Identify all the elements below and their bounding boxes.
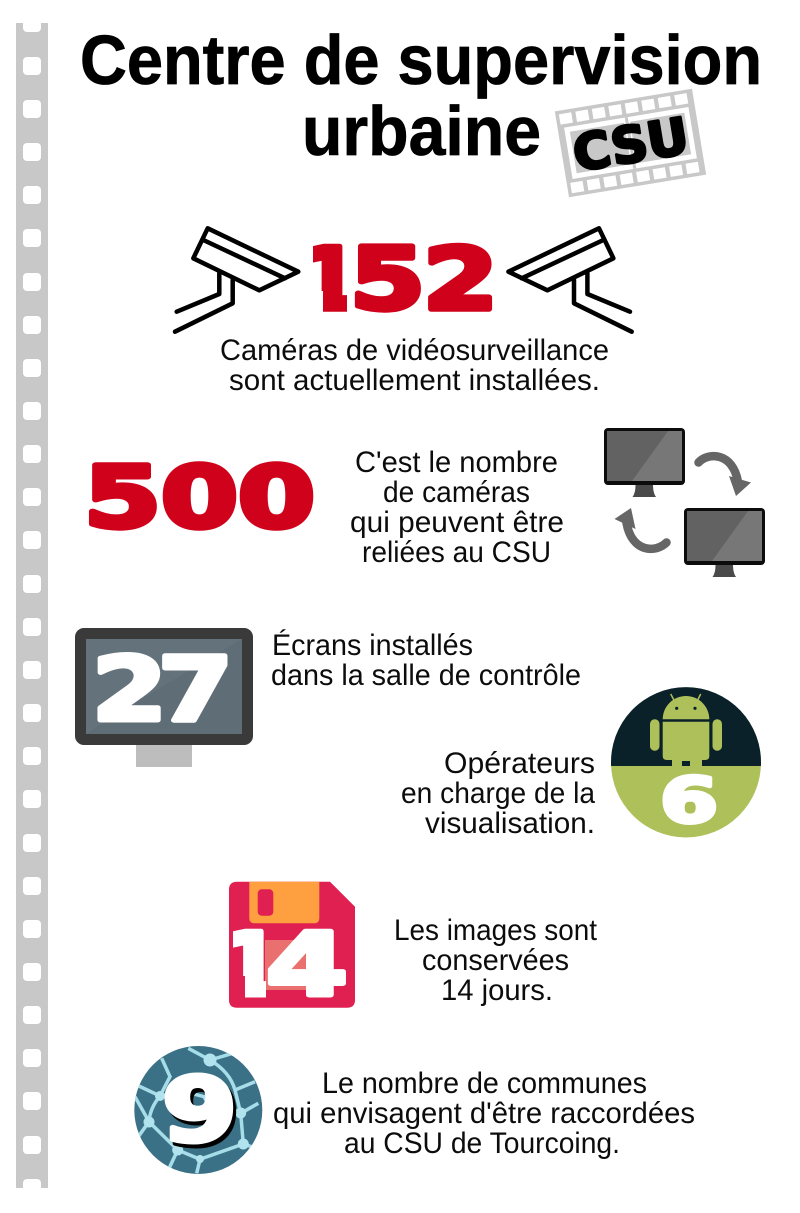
text: 500 caption: C'est le nombre: [355, 446, 558, 479]
number: 152: 1: [300, 230, 360, 330]
text: 500 caption: [350, 446, 564, 569]
stat: 152 cameras: [175, 228, 632, 397]
stat: 27 screens: [75, 628, 581, 767]
number: 27: [92, 638, 233, 741]
text: operators caption: en charge de la: [401, 777, 596, 810]
text: screens caption: dans la salle de contrôle: [271, 659, 581, 692]
stat: 9 municipalities: [134, 1046, 695, 1174]
icon: left surveillance camera: [175, 228, 298, 332]
icon: monitor with 27: [75, 628, 253, 767]
number: 152: 5: [350, 230, 425, 330]
text: cameras caption: sont actuellement installées.: [229, 364, 600, 397]
text: screens caption: [271, 629, 581, 692]
text: municipalities caption: qui envisagent d'être raccordées: [273, 1097, 695, 1130]
number: 27: 2: [92, 638, 167, 741]
number: 9: 9: [162, 1059, 237, 1162]
text: retention caption: conservées: [422, 944, 569, 977]
label: CSU: CSU: [569, 107, 693, 183]
icon: android badge with 6: [611, 687, 761, 838]
icon: monitor bottom: [684, 508, 765, 577]
number: 500: 500: [84, 449, 315, 548]
text: cameras caption: Caméras de vidéosurveillance: [220, 334, 609, 367]
arrow: top right: [698, 456, 751, 496]
stat: 14 days: [221, 882, 597, 1016]
icon: floppy disk with 14: [229, 882, 356, 1008]
icon: right surveillance camera: [508, 228, 632, 332]
text: cameras caption: [220, 334, 609, 397]
title: [80, 21, 762, 170]
stat: 6 operators: [401, 687, 761, 840]
text: municipalities caption: Le nombre de communes: [322, 1067, 647, 1100]
text: municipalities caption: au CSU de Tourcoing.: [344, 1127, 620, 1160]
text: operators caption: visualisation.: [425, 807, 595, 840]
icon: CSU film logo: [555, 89, 706, 197]
number: 6: 6: [660, 764, 718, 837]
text: screens caption: Écrans installés: [272, 629, 473, 662]
arrow: bottom left: [614, 508, 666, 549]
title: Centre de supervision: [80, 21, 762, 99]
text: 500 caption: reliées au CSU: [362, 536, 551, 569]
number: 152: 2: [423, 230, 498, 330]
number: 14: 1: [221, 914, 282, 1016]
text: operators caption: Opérateurs: [444, 747, 595, 780]
text: operators caption: [401, 747, 596, 840]
number: 14: 4: [266, 914, 348, 1016]
text: retention caption: 14 jours.: [441, 974, 553, 1007]
text: retention caption: Les images sont: [394, 914, 597, 947]
text: 500 caption: qui peuvent être: [350, 506, 564, 539]
number: 14: [233, 928, 346, 998]
icon: network globe with 9: [134, 1046, 262, 1174]
text: municipalities caption: [273, 1067, 695, 1160]
text: retention caption: [394, 914, 597, 1007]
icon: connected monitors: [604, 428, 765, 577]
film strip sidebar: [0, 10, 60, 1213]
title: urbaine: [302, 92, 541, 170]
text: 500 caption: de caméras: [383, 476, 530, 509]
number: 9: 9: [165, 1063, 240, 1166]
icon: monitor top: [604, 428, 685, 497]
number: 27: 7: [158, 638, 233, 741]
stat: 500 cameras: [84, 428, 765, 577]
number: 152: [313, 242, 492, 313]
